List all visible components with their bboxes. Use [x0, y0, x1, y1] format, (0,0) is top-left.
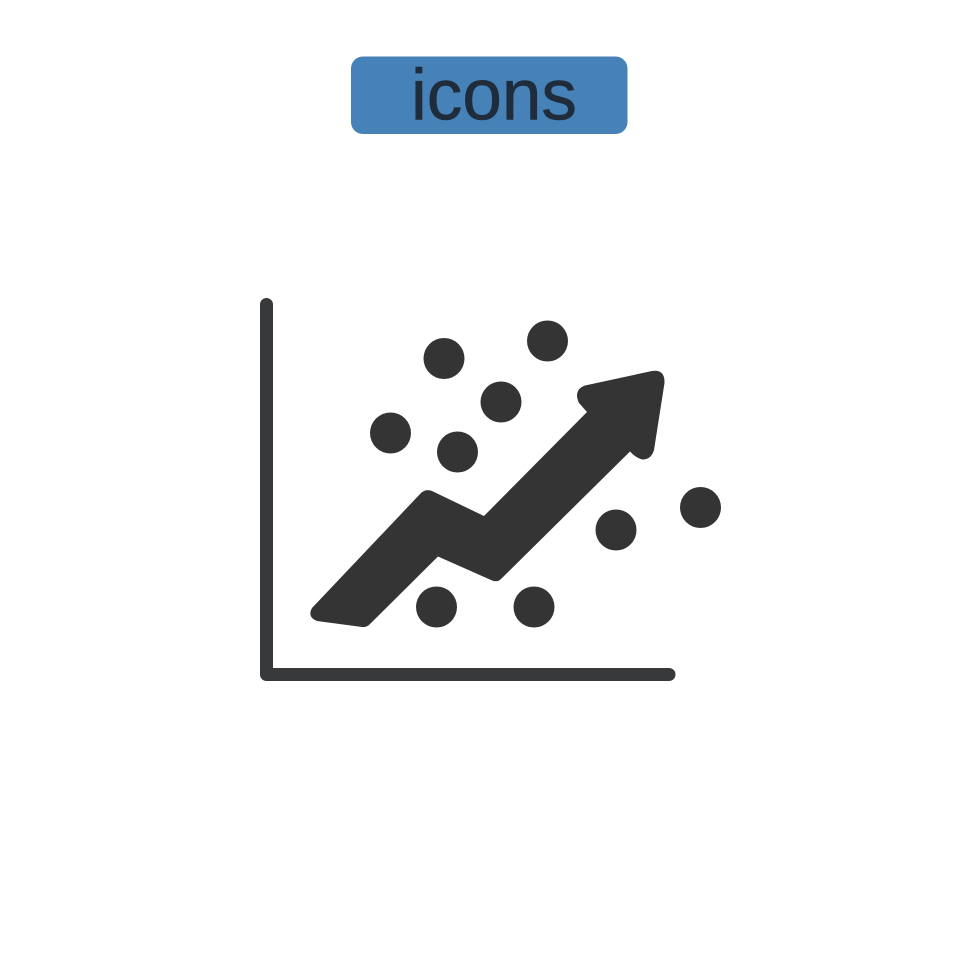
chart axes [266, 304, 669, 674]
heading text: icons [411, 56, 577, 136]
badge: icons heading [351, 56, 628, 136]
icon: scatter chart with rising arrow [266, 304, 721, 674]
scatter dots [370, 320, 721, 628]
rising zigzag arrow [310, 371, 665, 627]
